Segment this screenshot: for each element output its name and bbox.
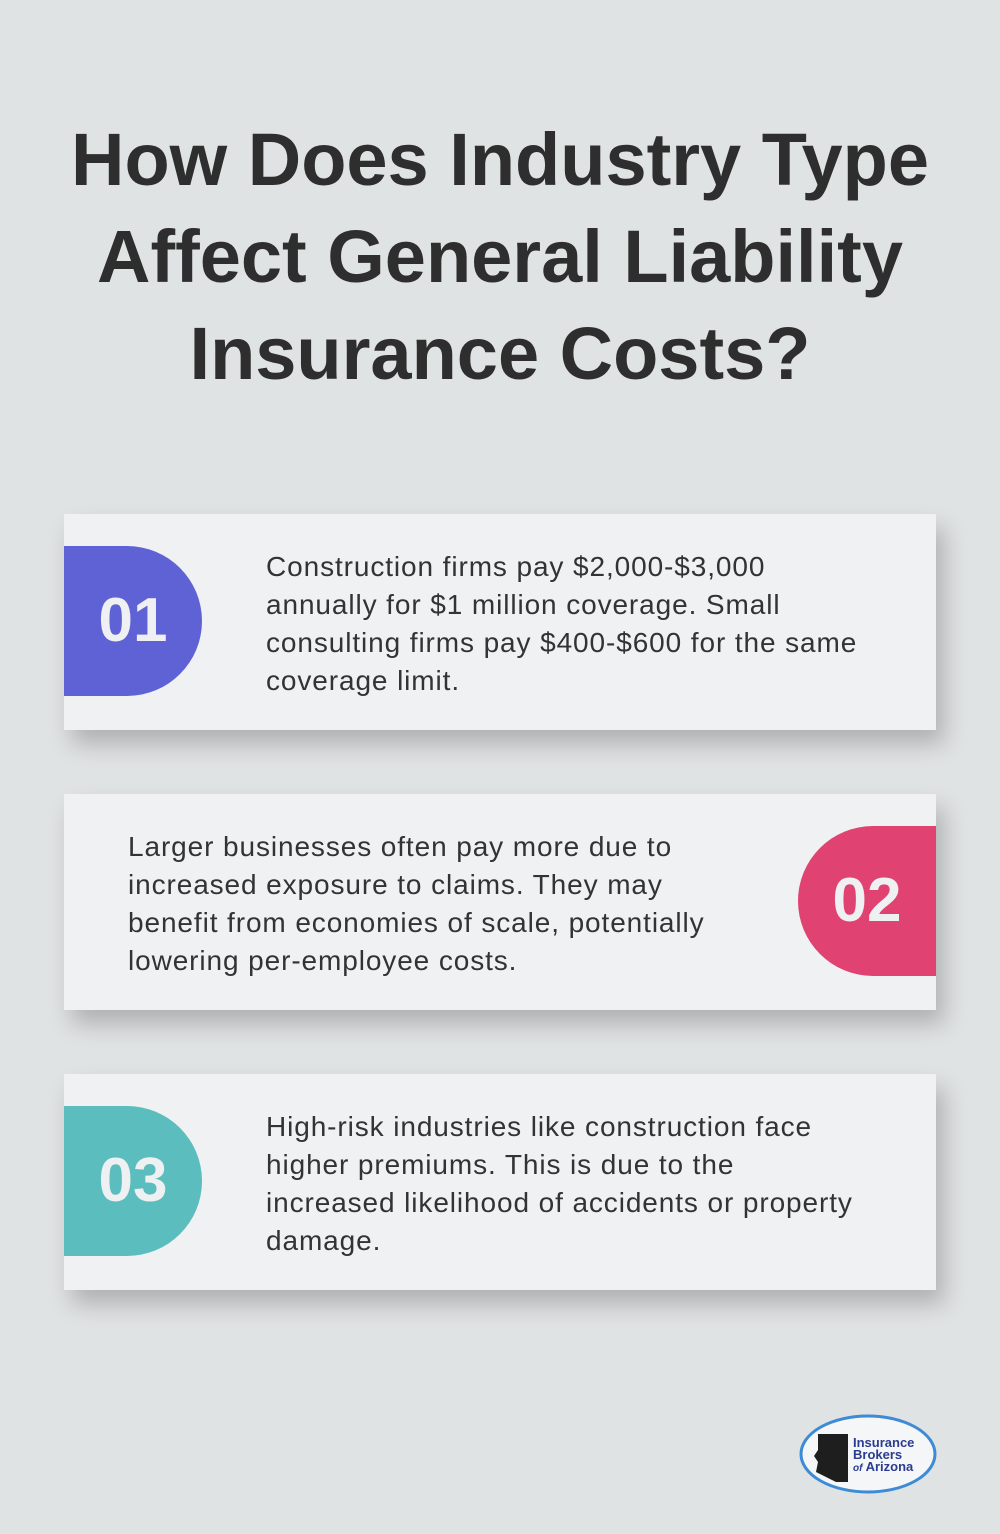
text 03 xyxy=(266,1111,853,1256)
badge 02 xyxy=(798,826,936,976)
text 02: lowering per-employee costs. xyxy=(128,945,517,976)
text 03: High-risk industries like construction face xyxy=(266,1111,812,1142)
logo xyxy=(800,1414,936,1494)
title xyxy=(71,118,929,395)
text 01: coverage limit. xyxy=(266,665,460,696)
text 02: benefit from economies of scale, potentially xyxy=(128,907,705,938)
text 02 xyxy=(128,831,705,976)
text 03: higher premiums. This is due to the xyxy=(266,1149,734,1180)
badge 01: 01 xyxy=(99,586,167,655)
panel: card 02 xyxy=(64,794,936,1010)
logo: Brokers xyxy=(853,1447,902,1462)
badge 03: 03 xyxy=(99,1146,167,1215)
title: How Does Industry Type xyxy=(71,118,929,201)
logo: of Arizona xyxy=(853,1459,914,1474)
text 01: consulting firms pay $400-$600 for the same xyxy=(266,627,857,658)
text 02: increased exposure to claims. They may xyxy=(128,869,663,900)
text 01 xyxy=(266,551,857,696)
panel: card 03 xyxy=(64,1074,936,1290)
panel: card 01 xyxy=(64,514,936,730)
badge 03 xyxy=(64,1106,202,1256)
text 01: annually for $1 million coverage. Small xyxy=(266,589,780,620)
text 01: Construction firms pay $2,000-$3,000 xyxy=(266,551,765,582)
title: Insurance Costs? xyxy=(190,312,810,395)
text 02: Larger businesses often pay more due to xyxy=(128,831,672,862)
badge 02: 02 xyxy=(833,866,901,935)
text 03: damage. xyxy=(266,1225,381,1256)
text 03: increased likelihood of accidents or property xyxy=(266,1187,853,1218)
logo: Insurance xyxy=(853,1435,914,1450)
badge 01 xyxy=(64,546,202,696)
title: Affect General Liability xyxy=(97,215,903,298)
